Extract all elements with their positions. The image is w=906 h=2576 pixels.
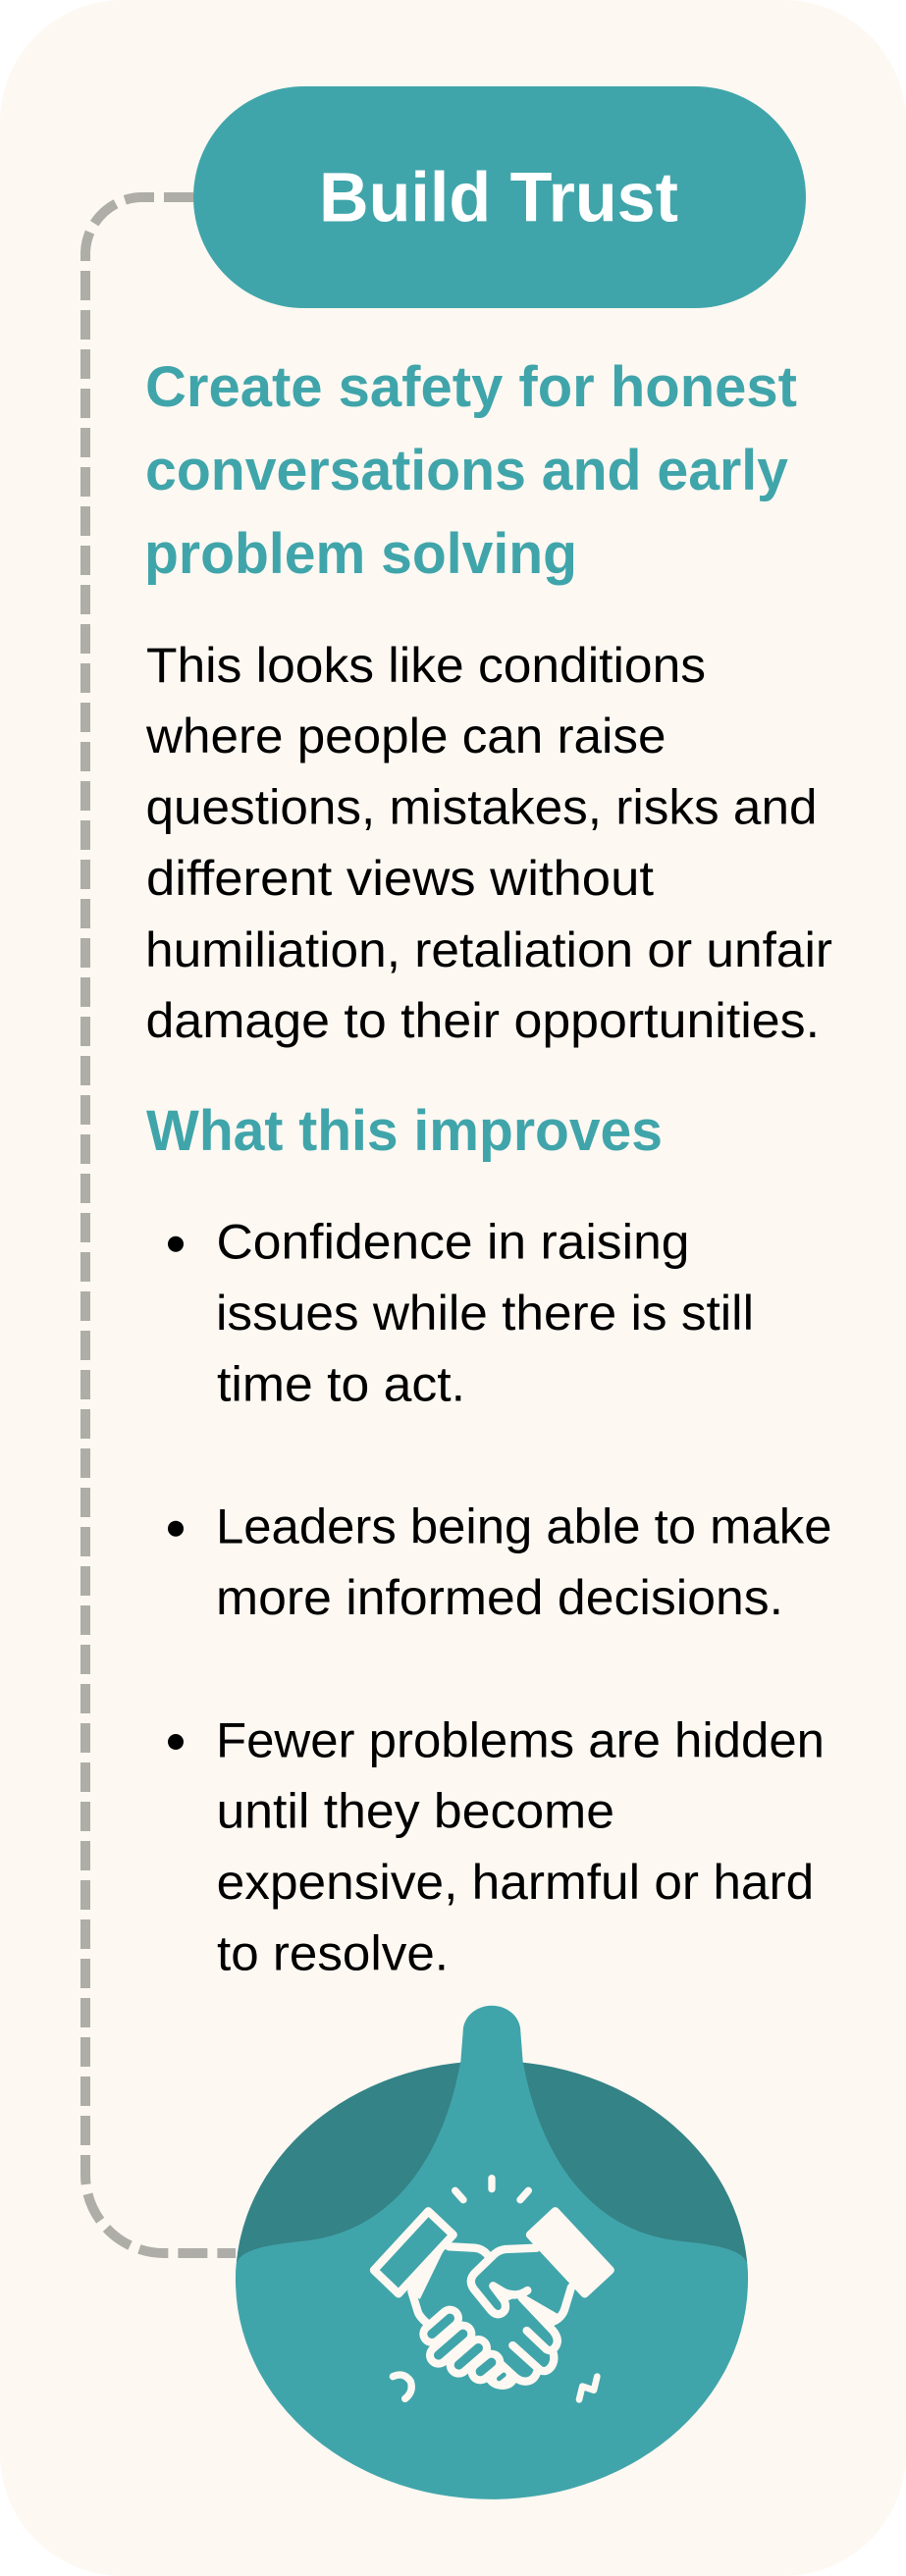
bullet 2 xyxy=(168,1499,832,1625)
body text paragraph: where people can raise xyxy=(145,709,666,763)
heading: Create safety for honest conversations and early problem solving: problem solving xyxy=(144,522,577,586)
body text paragraph: This looks like conditions xyxy=(146,638,706,693)
bullet 1 xyxy=(168,1215,754,1411)
icon: right hand fingers xyxy=(490,2287,571,2386)
bullet 3: until they become xyxy=(216,1784,614,1839)
icon: curl accent xyxy=(393,2375,411,2398)
icon: right hand thumb xyxy=(471,2248,537,2314)
title: Build Trust: Build Trust xyxy=(319,159,678,237)
body text paragraph xyxy=(145,638,832,1048)
icon: left cuff xyxy=(374,2211,453,2293)
bullet 1: Confidence in raising xyxy=(216,1215,689,1270)
body text paragraph: questions, mistakes, risks and xyxy=(145,779,817,834)
bullet 3 xyxy=(168,1713,825,1980)
bullet 1: issues while there is still xyxy=(216,1286,754,1341)
dashed connector from pill to circle xyxy=(85,197,236,2253)
title pill xyxy=(193,86,806,308)
icon: sparkle rays xyxy=(455,2179,528,2200)
heading: Create safety for honest conversations and early problem solving: Create safety for honest xyxy=(145,355,797,419)
bullet 3: expensive, harmful or hard xyxy=(217,1855,814,1910)
icon: zigzag accent xyxy=(579,2377,597,2399)
icon: right cuff xyxy=(530,2211,611,2293)
icon: handshake xyxy=(374,2179,611,2399)
heading: Create safety for honest conversations and early problem solving: conversations and early xyxy=(145,439,788,502)
bullet list xyxy=(168,1215,832,1980)
bullet 2: Leaders being able to make xyxy=(216,1499,832,1554)
body text paragraph: different views without xyxy=(146,851,654,906)
bullet 2: more informed decisions. xyxy=(216,1570,783,1625)
icon: left hand xyxy=(408,2244,489,2326)
bullet 3: to resolve. xyxy=(217,1925,449,1980)
heading: Create safety for honest conversations and early problem solving xyxy=(144,355,797,586)
teal flared shape xyxy=(236,2006,748,2499)
icon: left hand fingers xyxy=(432,2318,504,2379)
body text paragraph: humiliation, retaliation or unfair xyxy=(145,922,832,977)
subheading: What this improves: What this improves xyxy=(146,1099,663,1163)
body text paragraph: damage to their opportunities. xyxy=(145,993,820,1048)
circle badge with handshake icon xyxy=(236,2006,748,2499)
bullet 1: time to act. xyxy=(217,1356,465,1411)
bullet 3: Fewer problems are hidden xyxy=(216,1713,825,1768)
